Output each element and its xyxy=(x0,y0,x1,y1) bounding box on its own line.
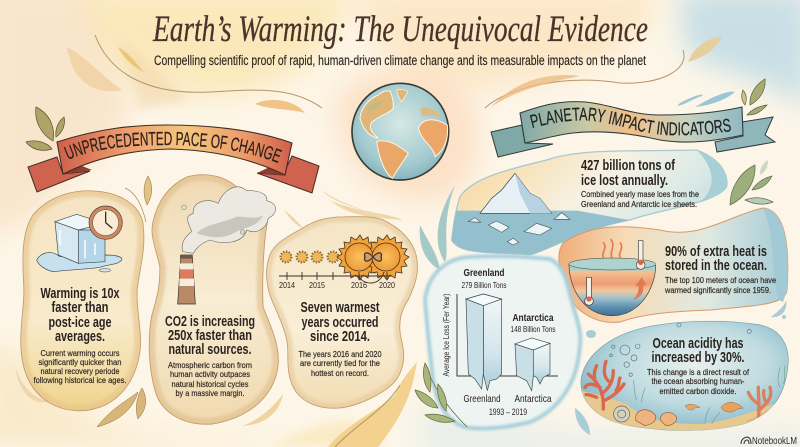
chart: axes and ice bars: Average Ice Loss (Fer Year) xyxy=(441,293,451,376)
text: ocean heat description xyxy=(664,275,776,295)
heading: CO2: 250x faster than xyxy=(168,328,252,344)
text: seven warmest description: hottest on record. xyxy=(311,368,369,378)
text: acidity description: the ocean absorbing human- xyxy=(652,376,745,386)
leaves by right banner xyxy=(742,79,767,115)
panel: ice loss chart xyxy=(425,256,580,428)
text: seven warmest description: The years 2016 and 2020 xyxy=(298,349,382,359)
icon: chimney and smoke xyxy=(178,187,276,304)
chart: axes and ice bars: Greenland xyxy=(464,393,501,405)
text: acidity description: emitted carbon dioxide. xyxy=(660,386,736,396)
icon: ocean bowl with thermometers xyxy=(569,239,656,316)
text: warming description xyxy=(34,348,126,385)
leaves by ice panel xyxy=(730,160,773,205)
heading: warming is 10x: averages. xyxy=(55,329,105,345)
text: warming description: significantly quicker than xyxy=(38,357,122,367)
panel: ocean heat xyxy=(559,208,788,322)
heading: 90% of extra heat: 90% of extra heat is xyxy=(665,244,767,260)
banner: planetary impact indicators xyxy=(490,101,776,158)
heading: ocean acidity: increased by 30%. xyxy=(652,349,744,366)
banner: planetary impact indicators: PLANETARY IMPACT INDICATORS xyxy=(530,108,731,136)
text: seven warmest description: are currently tied for the xyxy=(300,358,380,368)
text: warming description: natural recovery periode xyxy=(40,366,120,376)
text: CO2 description: Atmospheric carbon from xyxy=(168,360,252,370)
text: warming description: following historical ice ages. xyxy=(34,375,126,385)
ice panel illustration xyxy=(450,150,727,255)
chart: axes and ice bars: 1993 – 2019 xyxy=(489,407,527,417)
heading: 90% of extra heat: stored in the ocean. xyxy=(665,258,767,274)
chart: axes and ice bars: Antarctica xyxy=(512,312,554,324)
heading: CO2 xyxy=(165,314,255,358)
heading: seven warmest years: Seven warmest xyxy=(300,300,380,316)
chart: axes and ice bars xyxy=(441,267,558,417)
heading: seven warmest years: since 2014. xyxy=(310,329,370,345)
chart: axes and ice bars: Greenland xyxy=(464,267,504,279)
panel: CO2 card xyxy=(149,175,278,424)
timeline with suns: 2020 xyxy=(379,280,395,290)
heading: ocean acidity: Ocean acidity has xyxy=(652,335,744,352)
chart: axes and ice bars: 279 Billion Tons xyxy=(462,280,506,290)
heading: warming is 10x: post-ice age xyxy=(48,315,112,331)
icon: melting ice cube and clock xyxy=(37,206,122,272)
timeline with suns: 2015 xyxy=(309,280,325,290)
heading: CO2: natural sources. xyxy=(168,342,252,358)
text: acidity description xyxy=(647,367,750,396)
leaves by left banner xyxy=(26,107,65,150)
timeline with suns: 2016 xyxy=(351,280,367,290)
heading: CO2: CO2 is increasing xyxy=(165,314,255,330)
subtitle: Compelling scientific proof of rapid, human-driven climate change and its measurable impacts on the planet xyxy=(154,53,646,68)
panel: ice lost annually xyxy=(450,150,727,255)
decorative droplets xyxy=(575,300,786,435)
text: acidity description: This change is a direct result of xyxy=(647,367,750,377)
heading: 427 billion tons: 427 billion tons of xyxy=(581,158,675,174)
text: seven warmest description xyxy=(298,349,382,378)
panel: seven warmest years card xyxy=(267,217,417,408)
chart: axes and ice bars: 148 Billion Tons xyxy=(510,324,556,334)
heading: 427 billion tons: ice lost annually. xyxy=(581,173,668,189)
heading: seven warmest years xyxy=(300,300,380,345)
heading: warming is 10x: faster than xyxy=(52,300,108,316)
text: warming description: Current warming occurs xyxy=(40,348,120,358)
text: CO2 description: human activity outpaces xyxy=(170,369,250,379)
text: ice description: Combined yearly mase loes from the xyxy=(581,189,699,199)
text: ocean heat description: warmed significantly since 1959. xyxy=(664,285,771,295)
banner: unprecedented pace of change: UNPRECEDENTED PACE OF CHANGE xyxy=(64,132,282,163)
leaves at chart corner xyxy=(415,363,467,427)
heading: warming is 10x: Warming is 10x xyxy=(40,286,120,302)
panel: warming 10x card xyxy=(21,191,144,411)
seaweed decoration xyxy=(420,185,455,270)
timeline with suns xyxy=(279,235,409,290)
chart: axes and ice bars: Antarctica xyxy=(514,393,552,405)
panel: ocean acidity xyxy=(580,321,793,437)
heading: 90% of extra heat xyxy=(665,244,767,274)
text: CO2 description: natural historical cycles xyxy=(172,379,248,389)
text: ocean heat description: The top 100 meters of ocean have xyxy=(665,275,776,285)
text: ice description: Greenland and Antarctic ice sheets. xyxy=(581,199,697,209)
text: CO2 description xyxy=(168,360,252,398)
text: CO2 description: by a massive margin. xyxy=(176,388,244,398)
banner: unprecedented pace of change xyxy=(27,124,320,194)
heading: 427 billion tons xyxy=(581,158,675,189)
text: ice description xyxy=(581,189,699,209)
heading: seven warmest years: years occurred xyxy=(302,315,378,331)
icon: globe xyxy=(352,83,449,180)
timeline with suns: 2014 xyxy=(279,280,295,290)
heading: warming is 10x xyxy=(40,286,120,345)
heading: ocean acidity xyxy=(652,335,744,366)
